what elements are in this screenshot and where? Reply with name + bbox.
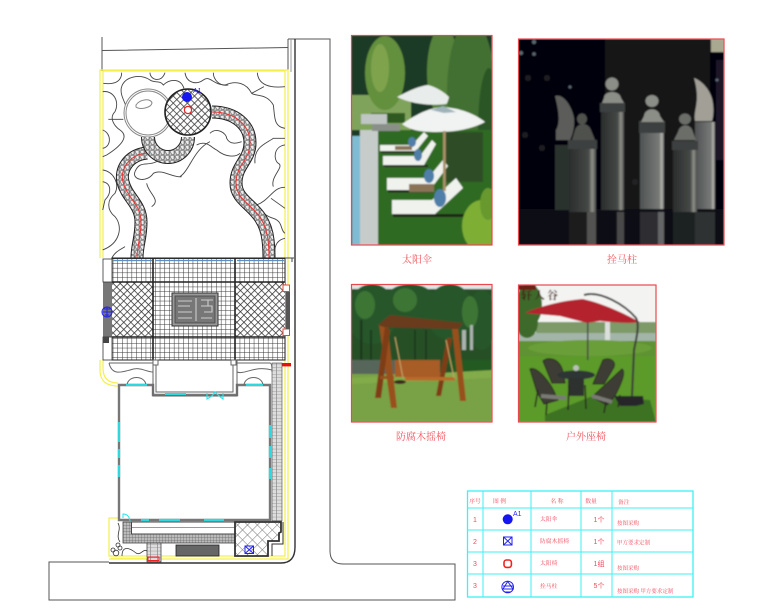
table header <box>469 497 630 506</box>
south terrace <box>111 522 283 562</box>
row 2: 1个 <box>594 538 604 546</box>
row 2: 防腐木摇椅 <box>540 537 569 545</box>
photo: outdoor table and parasol: 轩人谷 <box>521 288 560 302</box>
organic planting bed lines <box>103 73 285 258</box>
table header: 数量 <box>585 497 597 505</box>
chairs and table <box>530 359 624 405</box>
row 1: A1 <box>513 511 522 518</box>
reflections <box>569 212 715 245</box>
central paved plaza <box>102 258 294 366</box>
photo: hitching posts <box>518 39 724 245</box>
row 3: 太阳椅 <box>540 559 558 567</box>
caption: 拴马柱: 拴马柱 <box>607 253 637 266</box>
row 1: 太阳伞 <box>540 515 558 523</box>
row 4: 3 <box>473 583 477 590</box>
caption: 防腐木摇椅: 防腐木摇椅 <box>396 430 446 443</box>
diamond-paved corner <box>235 522 281 556</box>
photo: wooden swing chair <box>347 284 496 422</box>
red gate markers <box>283 285 290 336</box>
posts <box>555 145 570 210</box>
table grid <box>467 491 693 597</box>
table header: 备注 <box>618 498 630 506</box>
icon: swing marker <box>245 546 254 554</box>
table header: 图 例 <box>493 497 506 505</box>
row 2: 甲方要求定制 <box>617 538 651 546</box>
corner planting <box>111 523 147 558</box>
row 3 <box>473 559 640 572</box>
caption: 户外座椅: 户外座椅 <box>566 430 606 443</box>
pond <box>124 89 172 137</box>
steps <box>147 543 161 562</box>
caption: 太阳伞: 太阳伞 <box>402 253 432 266</box>
row 1 <box>473 511 640 527</box>
row 4: 拴马柱 <box>540 582 558 590</box>
label: A1: A1 <box>193 88 202 95</box>
row 2: 2 <box>473 539 477 546</box>
icon: hitching post marker <box>102 307 112 317</box>
site plan <box>49 37 455 600</box>
row 1: 按图采购 <box>617 519 640 527</box>
terrace and side gardens <box>109 360 272 399</box>
yellow planting boundary <box>100 70 288 559</box>
row 3: 1组 <box>594 559 604 568</box>
curved paving paths <box>122 112 269 258</box>
chairs <box>380 132 463 214</box>
icon: red seat marker <box>184 106 192 114</box>
center medallion <box>172 293 218 326</box>
row 4 <box>473 581 674 595</box>
gravel bed <box>176 545 219 556</box>
umbrellas <box>397 85 449 105</box>
row 3: 3 <box>473 561 477 568</box>
site boundary lines <box>49 37 455 600</box>
circular plaza with sun umbrella symbols <box>165 88 211 135</box>
east brick walkway <box>272 363 282 521</box>
west planting strip <box>103 282 112 337</box>
row 4: 按图采购 甲方要求定制 <box>617 587 674 595</box>
table header: 名 称 <box>550 497 564 505</box>
row 3: 按图采购 <box>617 564 640 572</box>
row 4: 5个 <box>594 582 604 590</box>
icon: blue umbrella marker <box>182 92 192 102</box>
legend table <box>467 491 693 597</box>
photo: sun umbrella and loungers <box>350 34 493 246</box>
table header: 序号 <box>469 497 481 505</box>
house outline <box>119 385 270 521</box>
row 1: 1 <box>473 517 477 524</box>
lions <box>555 96 574 140</box>
photo: outdoor table and parasol <box>516 283 656 422</box>
row 1: 1个 <box>594 516 604 524</box>
row 2 <box>473 537 651 546</box>
